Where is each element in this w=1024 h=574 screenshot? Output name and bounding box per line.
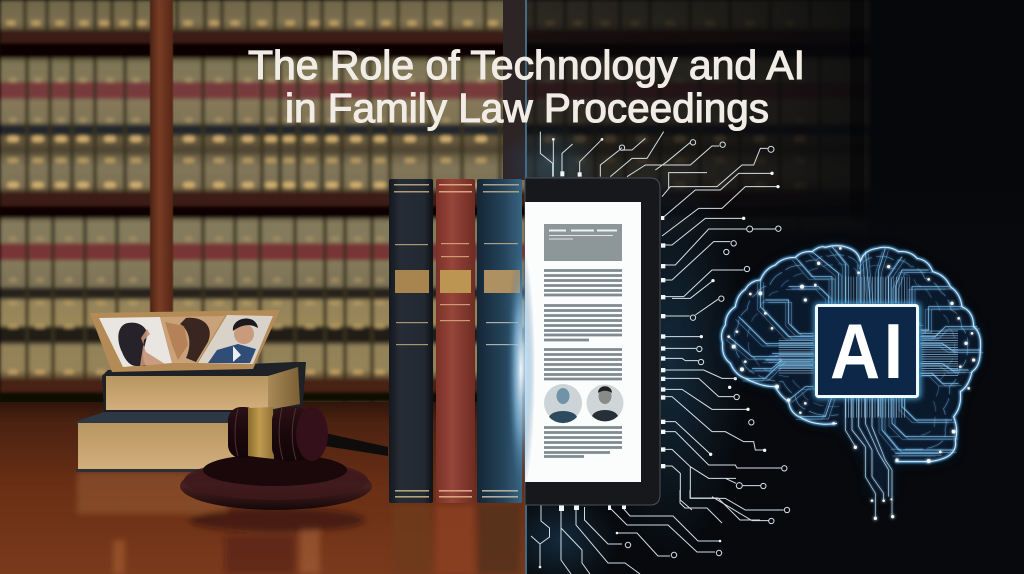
- light seam between print and digital: [507, 245, 535, 495]
- stacked law books: [76, 362, 306, 472]
- tablet with legal document: [525, 178, 660, 505]
- gavel and sound block: [180, 407, 388, 510]
- title: in Family Law Proceedings: [285, 85, 769, 131]
- brain glow: [722, 246, 980, 497]
- circuit traces from tablet: [531, 132, 790, 574]
- table surface: [0, 402, 525, 574]
- portrait photos: [544, 384, 624, 423]
- lower circuit traces: [531, 490, 760, 574]
- family photo frame: [90, 310, 280, 372]
- center seam column: [503, 0, 526, 180]
- document text blocks: [544, 270, 622, 456]
- book: red: [436, 179, 475, 503]
- upright legal books: [389, 179, 522, 503]
- AI chip: AI: [830, 307, 907, 395]
- book: dark navy: [389, 179, 433, 503]
- right half: dark technology background: [500, 0, 1024, 574]
- book: dark blue: [477, 179, 522, 503]
- glowing AI brain: [721, 246, 983, 520]
- document header: [544, 224, 622, 261]
- title: [248, 42, 805, 131]
- title: The Role of Technology and AI: [248, 42, 805, 88]
- brain outline and traces: [721, 246, 983, 520]
- AI chip: [814, 303, 921, 399]
- tablet screen: [525, 202, 641, 482]
- wooden shelf post: [150, 0, 173, 403]
